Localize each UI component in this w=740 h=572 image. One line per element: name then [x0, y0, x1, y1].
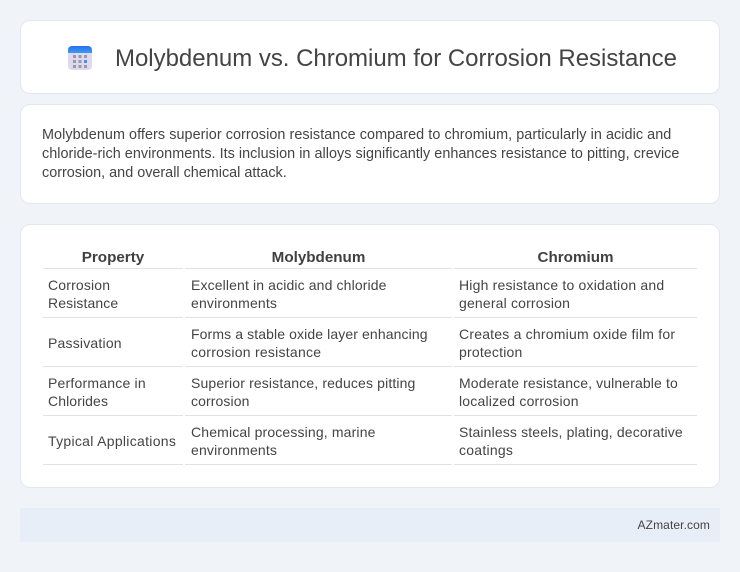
row: Corrosion Resistance: Corrosion: [48, 277, 110, 293]
panel: comparison table: [20, 224, 720, 488]
footer bar: [20, 508, 720, 542]
table header: Chromium: Chromium: [538, 249, 613, 266]
summary text: corrosion, and overall chemical attack.: [42, 165, 287, 181]
row: Performance in Chlorides: Performance in: [48, 375, 146, 391]
row: Corrosion Resistance: environments: [191, 295, 277, 311]
row: Performance in Chlorides: Superior resistance, reduces pitting: [191, 375, 416, 391]
row: Passivation: Passivation: [48, 335, 122, 351]
row: Passivation: Creates a chromium oxide film for: [459, 326, 675, 342]
row: Corrosion Resistance: [48, 277, 664, 311]
row: Typical Applications: [48, 424, 683, 458]
table header: Molybdenum: Molybdenum: [272, 249, 365, 266]
row: Corrosion Resistance: High resistance to oxidation and: [459, 277, 664, 293]
row: Corrosion Resistance: Resistance: [48, 295, 118, 311]
row: Passivation: [48, 326, 675, 360]
row: Performance in Chlorides: [48, 375, 678, 409]
row: Typical Applications: coatings: [459, 442, 513, 458]
panel: title: [20, 20, 720, 94]
row: Typical Applications: Chemical processing, marine: [191, 424, 376, 440]
row: Performance in Chlorides: Chlorides: [48, 393, 108, 409]
summary text: Molybdenum offers superior corrosion resistance compared to chromium, particularly in acidic and: [42, 127, 671, 143]
row: Typical Applications: Stainless steels, plating, decorative: [459, 424, 683, 440]
panel: summary: [20, 104, 720, 204]
row: Performance in Chlorides: localized corrosion: [459, 393, 579, 409]
row: Performance in Chlorides: corrosion: [191, 393, 249, 409]
row: Typical Applications: environments: [191, 442, 277, 458]
row: Performance in Chlorides: Moderate resistance, vulnerable to: [459, 375, 678, 391]
row: Passivation: protection: [459, 344, 522, 360]
row: Passivation: corrosion resistance: [191, 344, 321, 360]
heading: Molybdenum vs. Chromium for Corrosion Resistance: [115, 45, 677, 72]
summary text: [42, 127, 679, 181]
row: Passivation: Forms a stable oxide layer enhancing: [191, 326, 428, 342]
row: Corrosion Resistance: general corrosion: [459, 295, 570, 311]
table header: Property: Property: [82, 249, 144, 266]
row: Corrosion Resistance: Excellent in acidic and chloride: [191, 277, 387, 293]
icon: calendar: [68, 46, 92, 70]
row: Typical Applications: Typical Applications: [48, 433, 176, 449]
summary text: chloride-rich environments. Its inclusion in alloys significantly enhances resistance to pitting, crevice: [42, 146, 679, 162]
footer credit: AZmater.com: [638, 518, 710, 532]
